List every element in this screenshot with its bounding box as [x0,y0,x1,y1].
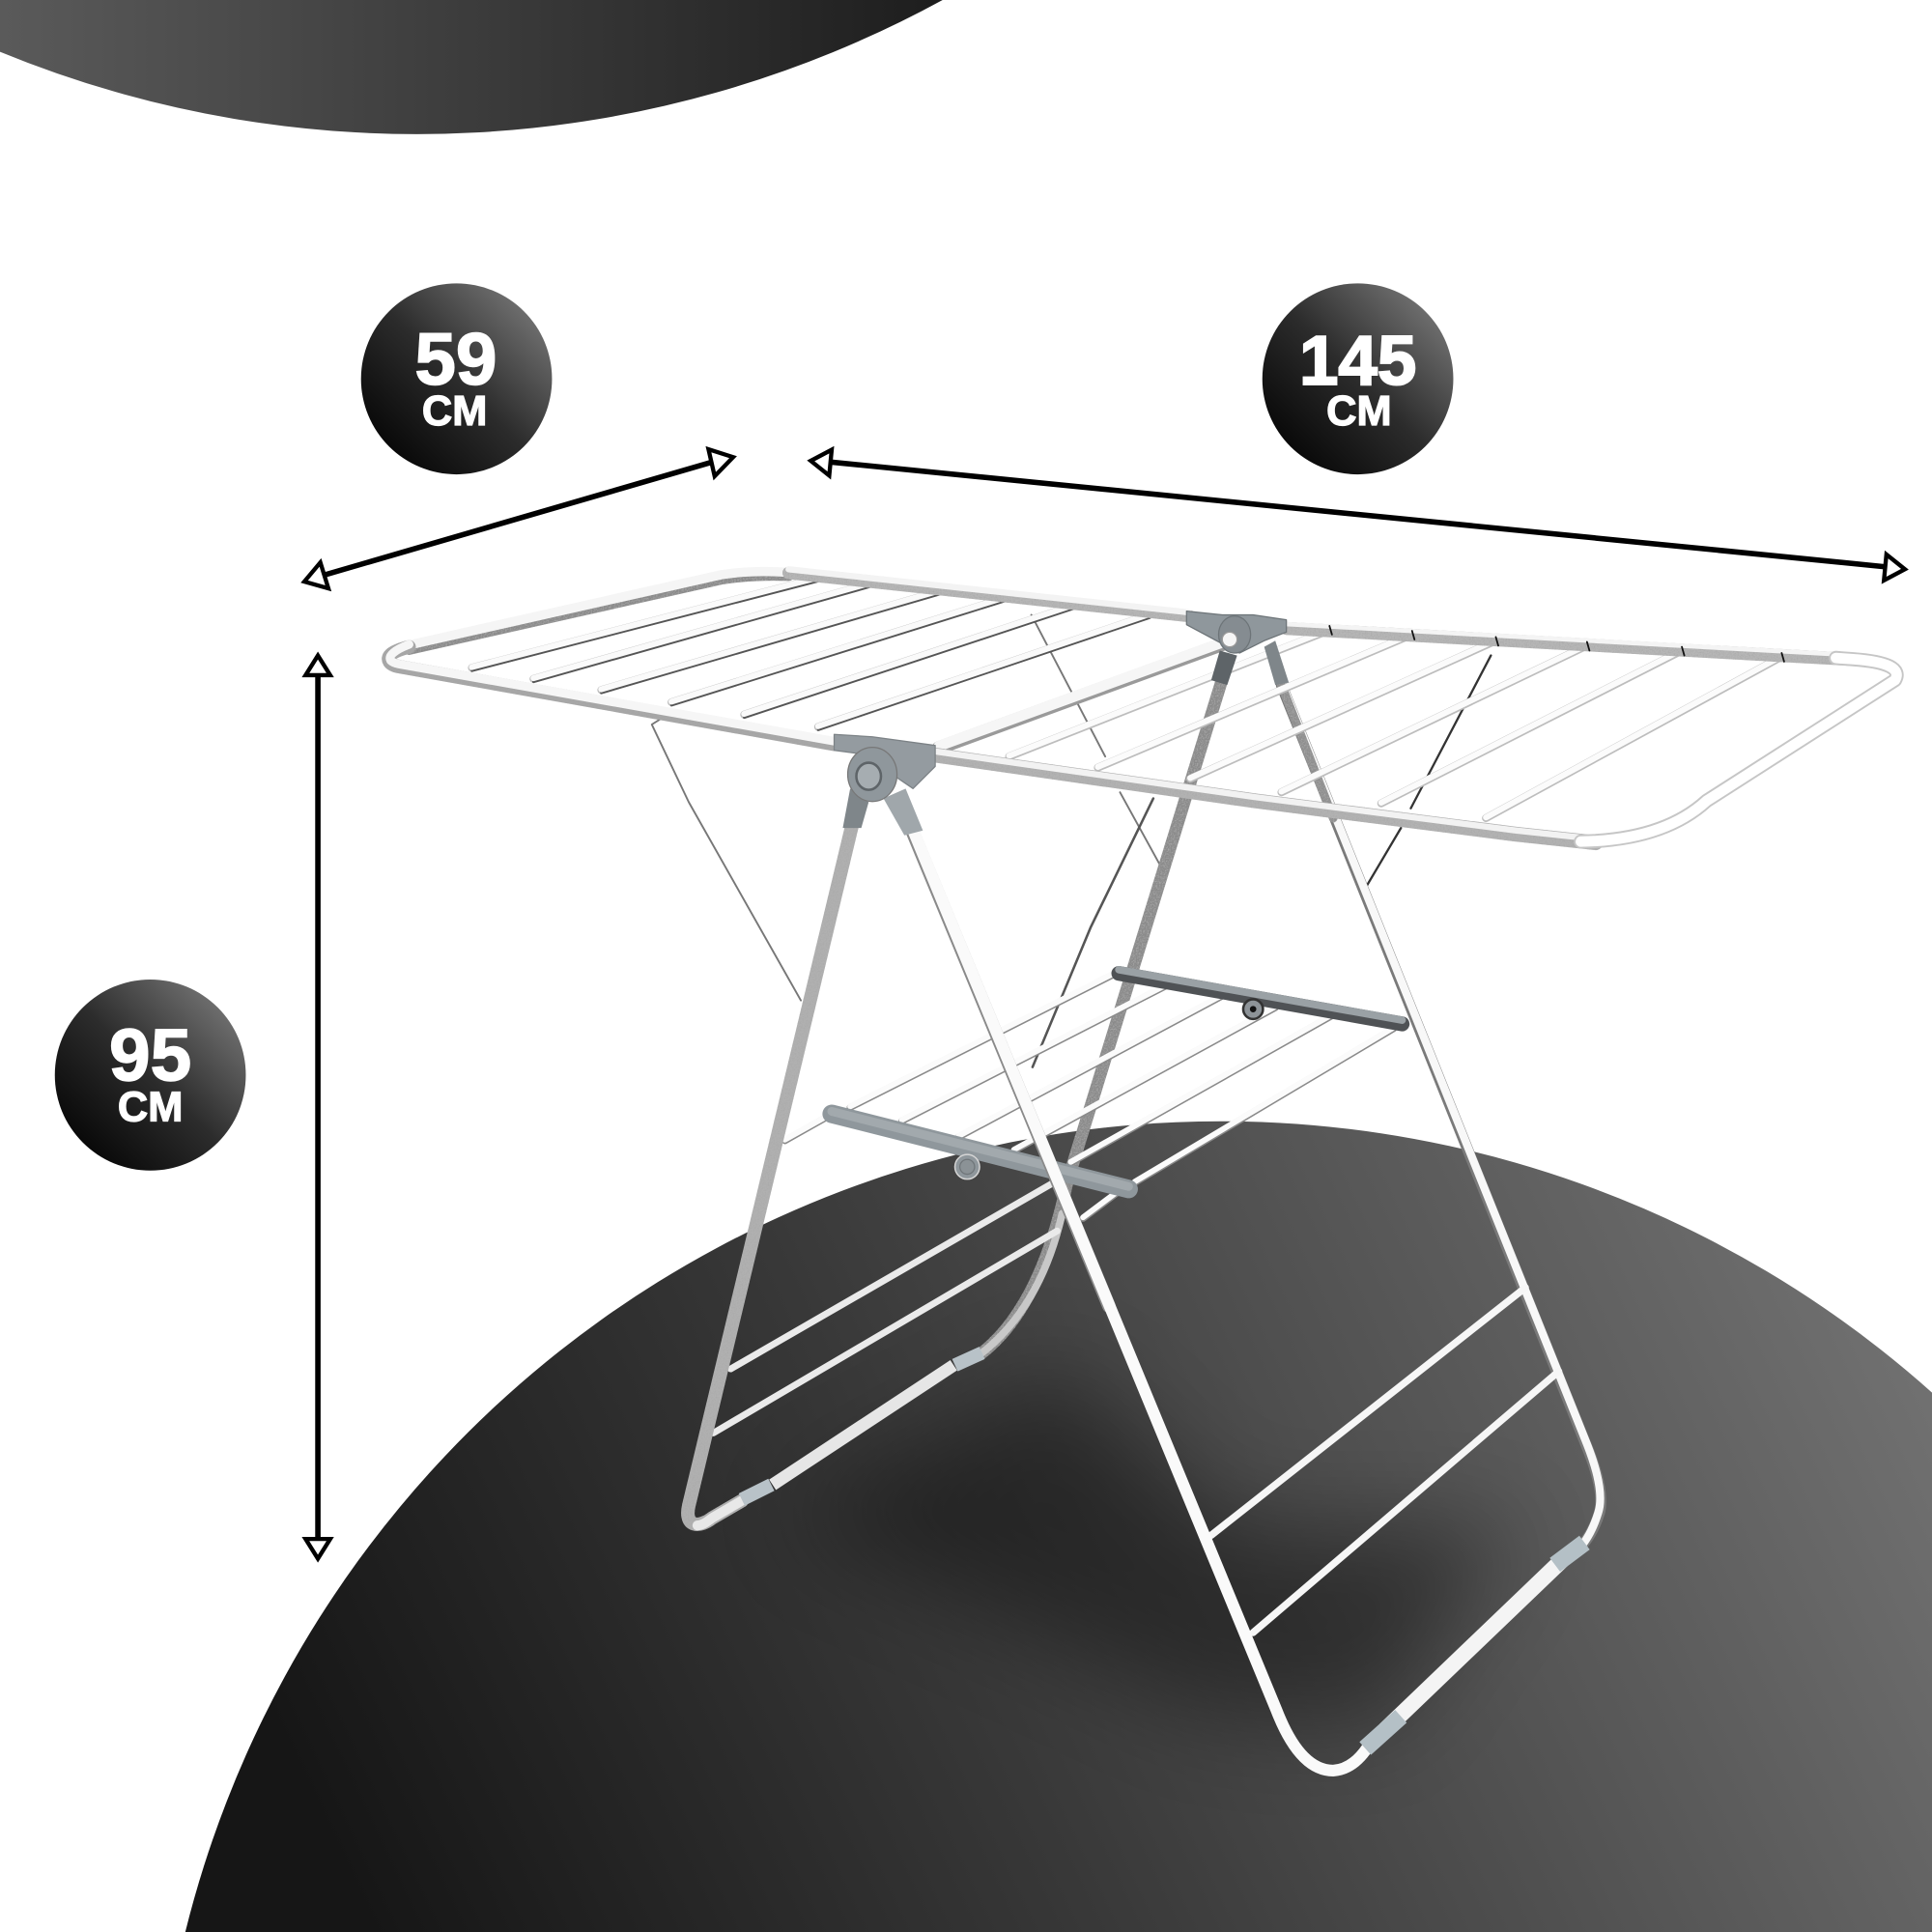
hub: rear hinge [1186,611,1289,685]
left front rail [388,644,835,744]
lower shelf rear bar [1119,970,1403,1024]
left back rail [409,569,1189,649]
arrow: height dimension [305,656,330,1559]
badge: 59 cm depth [361,283,552,474]
right front rail [936,752,1596,842]
right wing end [1580,658,1896,841]
bottom dark circle shape [185,1122,1932,1932]
arrow: depth dimension [304,449,733,588]
top dark arc shape [0,0,943,134]
top frame rail [388,569,1896,842]
hub: front hinge [835,734,935,836]
badge: 95 cm height: 95 [109,1015,191,1097]
badge: 95 cm height [55,980,245,1171]
right back rail [1287,624,1848,659]
bottom rods left [714,1179,1060,1433]
bottom rods right [1211,1288,1559,1633]
drying rack [388,569,1896,1771]
badge: 145 cm width: CM [1326,388,1392,435]
badge: 145 cm width: 145 [1299,322,1416,400]
upper rods right wing [1009,629,1781,818]
front right leg and foot [913,833,1584,1771]
back right leg [1282,685,1601,1545]
arrow: width dimension [810,450,1905,581]
badge: 59 cm depth: CM [422,388,487,435]
front left leg and foot [688,823,982,1525]
lower shelf front bar [832,1112,1128,1189]
badge: 145 cm width [1263,283,1453,474]
floor shadow [788,1368,1516,1725]
badge: 59 cm depth: 59 [414,319,497,401]
rod hooks [1329,626,1784,662]
badge: 95 cm height: CM [118,1085,183,1131]
upper rods left wing [472,576,1150,730]
support wires [652,614,1491,1067]
lower shelf rods [784,974,1394,1218]
central cross tube [939,639,1233,748]
back left leg and foot [773,663,1227,1485]
